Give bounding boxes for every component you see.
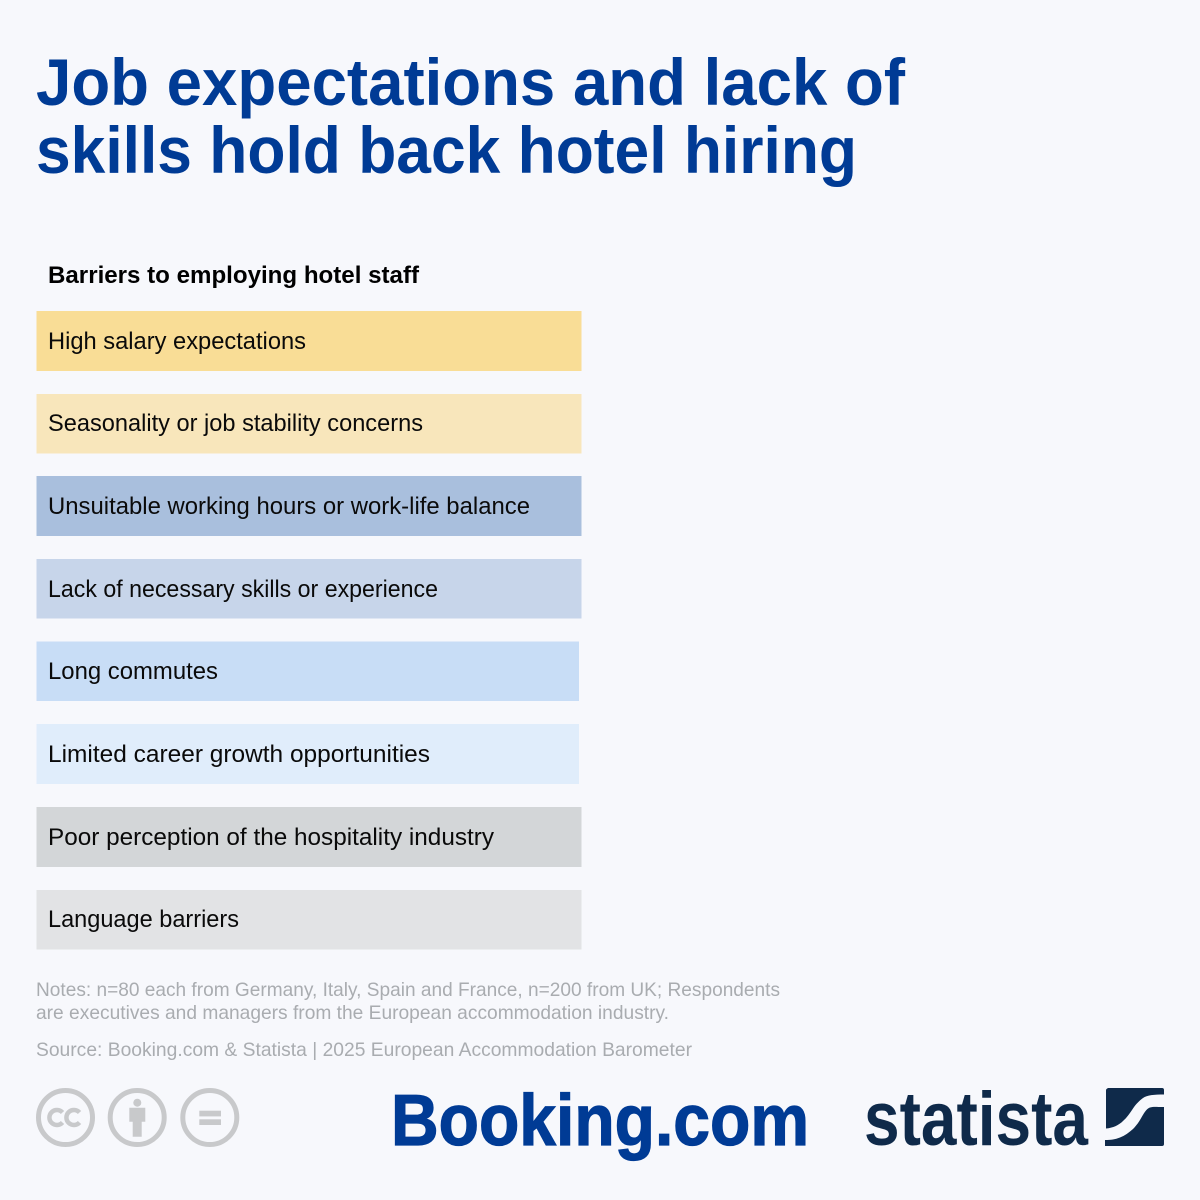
bar: Unsuitable working hours (36, 476, 582, 536)
bar: Language barriers (36, 890, 582, 950)
bar: Language barriers: Language barriers (48, 906, 239, 933)
bar: Unsuitable working hours: Unsuitable working hours or work-life balance (48, 493, 530, 520)
bar: Limited career growth: Limited career growth opportunities (48, 741, 430, 768)
bar: High salary expectations: High salary expectations (48, 328, 306, 355)
notes: are executives and managers from the European accommodation industry. (36, 1002, 669, 1024)
bar: High salary expectations (36, 311, 582, 371)
logo: Booking.com: Booking.com (391, 1081, 809, 1161)
title: Job expectations and lack of (36, 45, 906, 119)
source: Source: Booking.com & Statista | 2025 European Accommodation Barometer (36, 1039, 692, 1061)
bar: Long commutes (36, 642, 579, 701)
icon: no derivatives (183, 1090, 237, 1144)
icon: creative commons (38, 1090, 92, 1144)
panel: barrier list (36, 311, 582, 950)
bar: Long commutes: Long commutes (48, 658, 218, 685)
bar: Seasonality or job stability concerns: Seasonality or job stability concerns (48, 410, 423, 437)
icon: attribution (110, 1090, 164, 1144)
title: skills hold back hotel hiring (36, 113, 857, 187)
bar: Poor perception (36, 807, 582, 867)
chart heading: Barriers to employing hotel staff (48, 262, 420, 289)
title (36, 45, 906, 187)
bar: Limited career growth (36, 724, 579, 784)
bar: Lack of necessary skills: Lack of necessary skills or experience (48, 576, 438, 603)
logo: statista: statista (864, 1077, 1089, 1162)
bar: Lack of necessary skills (36, 559, 582, 618)
bar: Poor perception: Poor perception of the hospitality industry (48, 824, 495, 851)
bar: Seasonality or job stability concerns (36, 394, 582, 454)
notes: Notes: n=80 each from Germany, Italy, Spain and France, n=200 from UK; Respondents (36, 979, 780, 1001)
notes (36, 979, 780, 1024)
